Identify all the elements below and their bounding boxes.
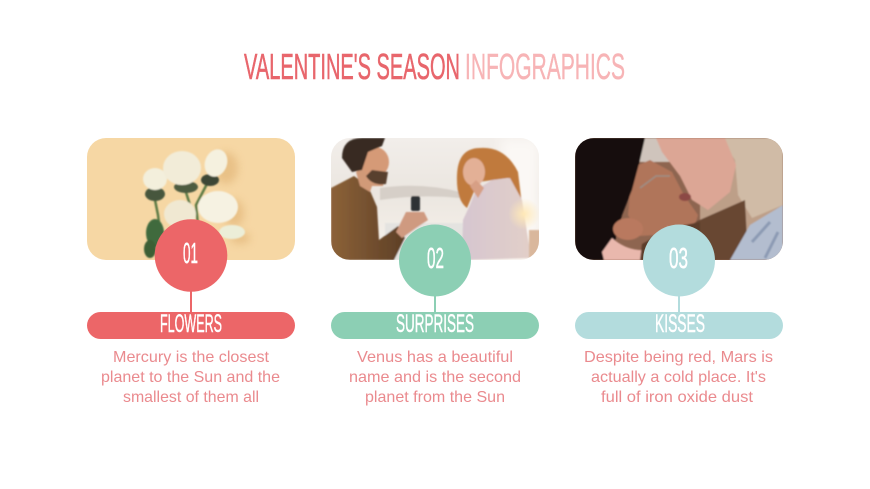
description: flowers: smallest of them all <box>123 389 259 406</box>
number circle 02 <box>399 224 471 296</box>
description: kisses <box>584 349 773 406</box>
photo: white roses <box>87 138 295 260</box>
number circle 03: 03 <box>669 243 688 275</box>
connector line <box>434 292 436 314</box>
panel: surprises <box>331 138 540 406</box>
description: surprises <box>349 349 521 406</box>
title <box>244 46 625 87</box>
label bar: flowers: FLOWERS <box>160 310 222 338</box>
title: light part: INFOGRAPHICS <box>465 46 625 87</box>
label bar: surprises: SURPRISES <box>396 310 474 338</box>
description: flowers: Mercury is the closest <box>113 349 270 366</box>
description: kisses: full of iron oxide dust <box>601 389 754 406</box>
description: surprises: name and is the second <box>349 369 521 386</box>
panel: flowers <box>87 138 295 406</box>
number circle 03 <box>643 224 715 296</box>
label bar: surprises <box>331 310 539 339</box>
photo: couple kissing <box>575 138 783 260</box>
title: dark part: VALENTINE'S SEASON <box>244 46 460 87</box>
label bar: flowers <box>87 310 295 339</box>
description: surprises: planet from the Sun <box>365 389 505 406</box>
number circle 01 <box>155 219 227 292</box>
number circle 02: 02 <box>427 243 444 275</box>
number circle 01: 01 <box>183 238 198 270</box>
description: kisses: Despite being red, Mars is <box>584 349 773 366</box>
connector line <box>678 292 680 314</box>
description: flowers: planet to the Sun and the <box>101 369 280 386</box>
panel: kisses <box>575 138 783 406</box>
description: flowers <box>101 349 280 406</box>
photo: proposal <box>331 138 540 260</box>
label bar: kisses: KISSES <box>655 310 705 338</box>
label bar: kisses <box>575 310 783 339</box>
description: surprises: Venus has a beautiful <box>357 349 513 366</box>
connector line <box>190 288 192 314</box>
description: kisses: actually a cold place. It's <box>591 369 766 386</box>
